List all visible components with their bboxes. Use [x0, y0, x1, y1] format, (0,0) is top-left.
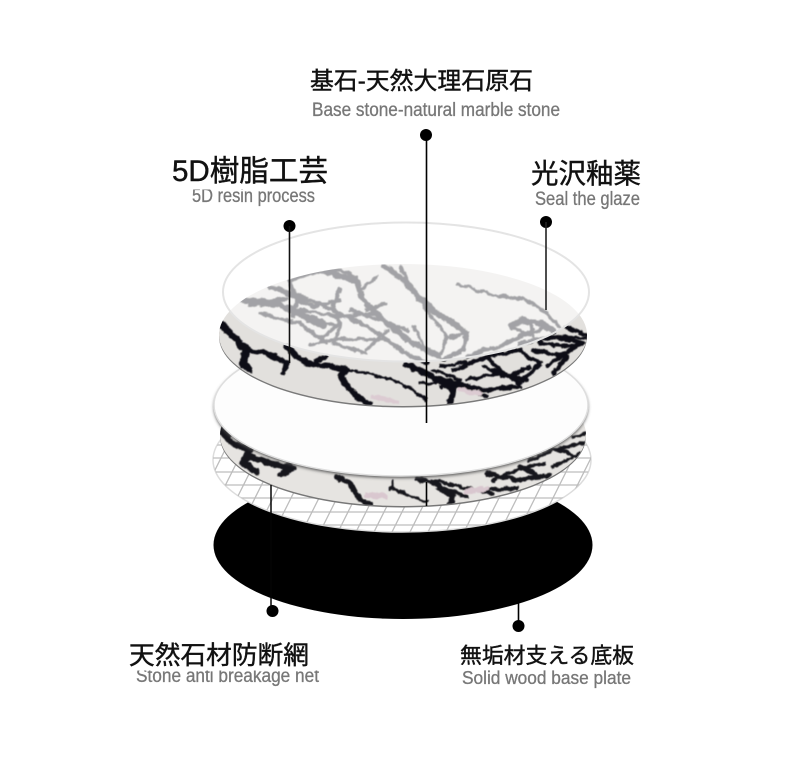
- label: seal the glaze: 光沢釉薬: [531, 158, 641, 189]
- label: solid wood base plate: 無垢材支える底板: [460, 643, 634, 668]
- label: anti breakage net: [129, 642, 325, 687]
- layer: black wood base plate: [214, 471, 592, 619]
- leader: base plate: [512, 590, 524, 632]
- label: 5D resin process: [172, 155, 328, 207]
- layer: lower marble slab: [220, 423, 586, 508]
- leader: net: [266, 485, 278, 617]
- label: solid wood base plate: [460, 643, 634, 688]
- leader: 5D resin: [284, 220, 296, 363]
- layer: white resin plate: [214, 334, 588, 478]
- layer: upper marble slab: [219, 264, 587, 408]
- layer: glossy glaze: [223, 222, 589, 362]
- label: solid wood base plate: Solid wood base plate: [462, 668, 631, 688]
- label: anti breakage net: 天然石材防断網: [129, 642, 309, 670]
- layer: anti breakage net: [212, 440, 592, 533]
- label: 5D resin process: 5D resin process: [192, 186, 315, 207]
- label: anti breakage net: Stone anti breakage net: [136, 666, 320, 687]
- label: base stone: [310, 68, 560, 121]
- leader: glaze: [540, 216, 552, 310]
- label: base stone: Base stone-natural marble stone: [312, 100, 560, 121]
- marble vein network: [220, 265, 587, 404]
- label: seal the glaze: Seal the glaze: [535, 189, 640, 210]
- leader: base stone: [420, 129, 432, 506]
- label: 5D resin process: 5D樹脂工芸: [172, 155, 328, 188]
- exploded layer diagram: [130, 68, 640, 688]
- label: base stone: 基石-天然大理石原石: [310, 68, 533, 95]
- label: seal the glaze: [531, 158, 641, 210]
